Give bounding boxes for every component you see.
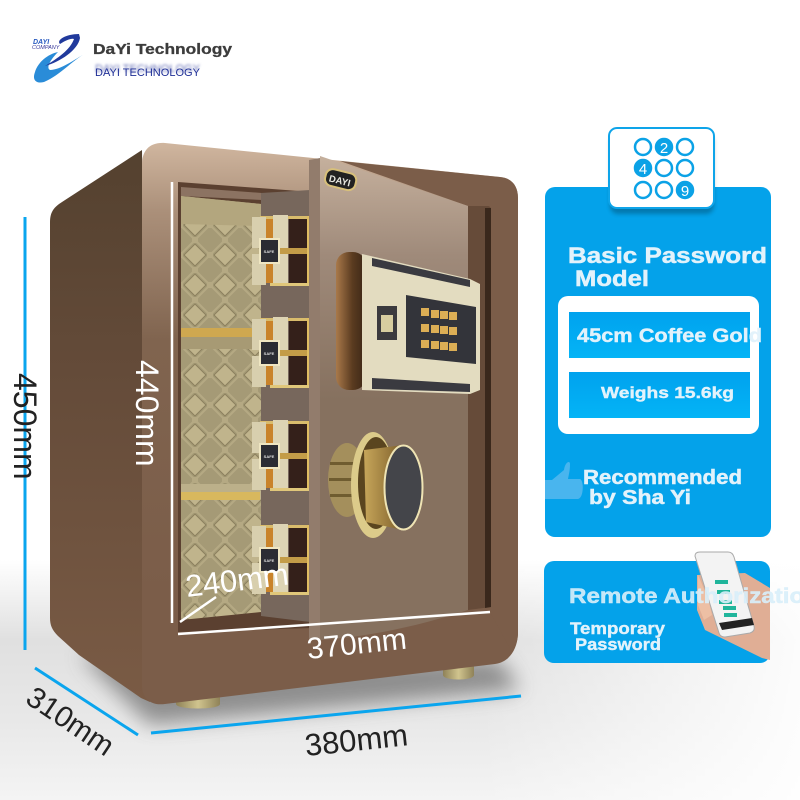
fingers [698,575,712,620]
bolt four [252,524,310,595]
dimension 370mm line [178,612,490,634]
240mm label: 240mm [184,557,290,604]
keypad keys [421,308,457,351]
depth dimension line [35,668,138,735]
panel subtitle: Temporary [570,619,666,638]
door panel [320,156,468,640]
icon card: keypad [609,128,714,214]
shelf two lip [181,484,260,492]
panel title: Basic Password [568,243,767,268]
ceiling [181,196,261,226]
ceiling band [181,187,262,200]
spec card [558,296,759,434]
logo swoosh icon [32,34,86,83]
icon card: keypad: 4 [639,161,647,178]
interior side wall [261,190,310,622]
380mm label: 380mm [303,717,410,763]
panel title second line: Model [575,266,649,291]
foot right [443,666,474,680]
spec text weight: Weighs 15.6kg [601,385,734,402]
recommendation text second line: by Sha Yi [589,487,691,509]
bolt one: SAFE [264,249,275,254]
310mm label: 310mm [20,680,120,763]
spec text colour: 45cm Coffee Gold [577,326,762,347]
side vents [160,250,168,560]
brand plate: DAYI [328,173,352,189]
floor shadow [80,655,520,725]
dial face [384,446,422,530]
door edge [309,158,320,640]
keypad handle [336,252,366,390]
logo swoosh icon: COMPANY [32,45,60,51]
dial base ribs [329,462,354,497]
frame right side tone [340,161,518,652]
spec bar weight [569,372,750,418]
dimension 440mm line [171,182,173,623]
panel title: Remote Authorization [569,585,800,608]
bolt two [252,317,310,388]
icon: phone in hand [695,552,770,660]
450mm label: 450mm [7,373,43,480]
recess dark line [485,208,491,608]
shelf one lip [181,337,260,349]
logo swoosh icon: DAYI [33,39,50,46]
right recess [468,206,491,610]
height dimension line [24,217,26,650]
dial knob [328,432,422,538]
logo [32,34,233,83]
dial body [364,445,403,530]
bolt four: SAFE [264,558,275,563]
370mm label: 370mm [305,623,408,666]
right background fade [480,540,800,800]
interior back wall lattice [181,196,261,620]
440mm label: 440mm [129,360,165,467]
width dimension line [151,696,521,733]
bolt three: SAFE [264,454,275,459]
dial knurled base [328,443,366,517]
icon: thumbs up [545,462,583,499]
panel background [545,187,771,537]
safe illustration [50,143,518,708]
phone messages [715,580,737,617]
brand plate [324,168,358,192]
panel: basic password model [545,187,771,537]
recommendation text: Recommended [583,467,742,489]
foot left [176,696,220,708]
keypad panel [362,254,480,394]
door opening [178,182,312,632]
phone bottom bar [719,618,754,630]
panel: remote authorization [544,552,800,663]
bolt two: SAFE [264,351,275,356]
dial collar [351,432,395,538]
logo subtitle: DAYI TECHNOLOGY [95,67,201,79]
icon card: keypad: 2 [660,140,668,157]
shelf one [181,328,260,337]
bolt three [252,420,310,491]
icon card: keypad: 9 [681,183,689,200]
logo subtitle ghost: DAYI TECHNOLOGY [95,63,201,75]
shelf two [181,492,260,500]
bolt one [252,215,310,286]
logo company name: DaYi Technology [93,41,233,58]
safe side panel [50,150,150,702]
phone body [695,552,754,637]
safe front frame [142,143,518,704]
dimension 240mm line [180,597,216,622]
spec bar colour [569,312,750,358]
panel subtitle second line: Password [575,635,661,654]
hand [697,573,770,660]
panel background [544,561,770,663]
